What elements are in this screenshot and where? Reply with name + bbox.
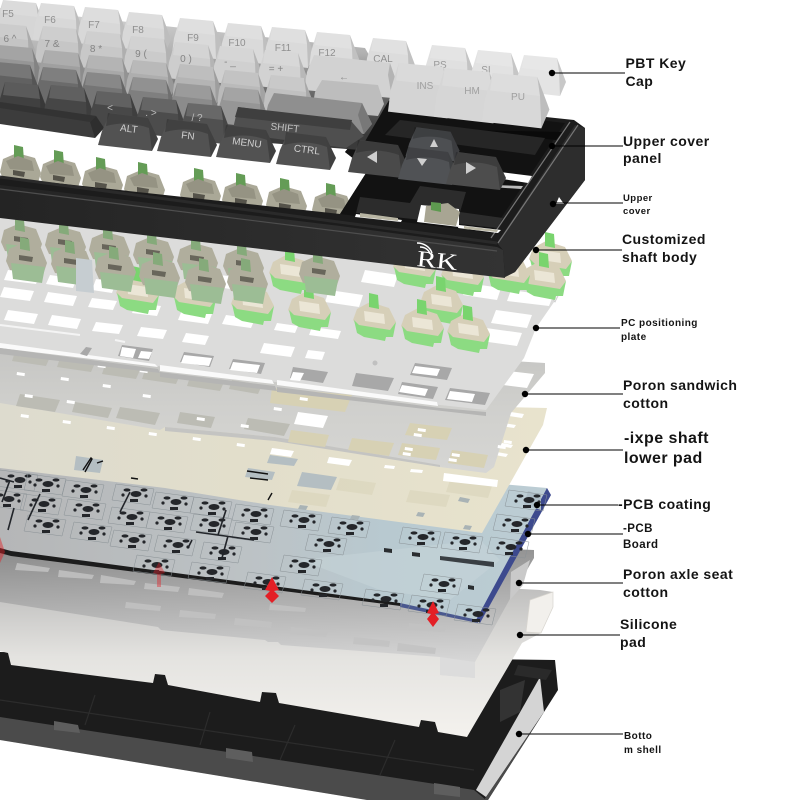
key: backspace: ← xyxy=(339,72,349,83)
number row: 0 ) xyxy=(180,54,192,65)
keycap block shading xyxy=(0,8,392,150)
label: Poron sandwich cotton: Poron sandwich xyxy=(623,377,737,393)
navigation front row: HM xyxy=(464,86,480,97)
lower switches bright xyxy=(116,232,572,353)
label: PCB coating xyxy=(534,496,711,512)
function row: CAL xyxy=(373,54,393,65)
silicone pad xyxy=(0,560,553,737)
function row: F12 xyxy=(318,48,336,59)
key: CTRL xyxy=(276,132,336,170)
label: PCB Board: -PCB xyxy=(623,523,653,535)
label: Upper cover: cover xyxy=(623,206,651,217)
home row xyxy=(0,45,384,116)
plate white windows xyxy=(0,270,553,402)
number row: 9 ( xyxy=(135,49,148,60)
letter row: / ? xyxy=(191,113,203,124)
ixpe shaft lower pad xyxy=(0,395,547,533)
poron cut-outs xyxy=(270,388,488,468)
function row: F6 xyxy=(44,15,56,26)
label: PBT Key Cap: PBT Key xyxy=(626,55,686,71)
label: PCB Board xyxy=(525,523,658,551)
label: Poron axle seat cotton xyxy=(516,566,733,600)
lower home row xyxy=(0,62,372,134)
key: shift xyxy=(232,107,364,148)
lower switches dull xyxy=(1,218,340,304)
number row: 7 & xyxy=(44,39,60,50)
bottom shell xyxy=(0,652,558,800)
label: Upper cover: Upper xyxy=(623,193,653,204)
label: PBT Key Cap: Cap xyxy=(626,73,653,89)
label: Customized shaft body: shaft body xyxy=(622,249,697,265)
PC positioning plate xyxy=(0,215,561,416)
navigation back row xyxy=(424,45,566,96)
label: ixpe shaft lower pad xyxy=(523,430,709,467)
upper cover xyxy=(0,100,585,278)
key: CTRL: CTRL xyxy=(293,143,321,158)
customized shaft body: switches xyxy=(0,145,572,353)
number row: 6 ^ xyxy=(3,34,17,45)
label: Poron sandwich cotton: cotton xyxy=(623,395,668,411)
function row: F8 xyxy=(132,25,144,36)
key: FN: FN xyxy=(181,130,195,143)
key: MENU xyxy=(216,125,276,163)
number row: = + xyxy=(269,64,283,75)
key: backspace xyxy=(304,55,398,98)
label: Poron sandwich cotton xyxy=(522,377,737,411)
navigation front row: INS xyxy=(417,81,434,92)
function row: F9 xyxy=(187,33,199,44)
axle seat slots xyxy=(15,563,446,654)
label: PCB coating: -PCB coating xyxy=(618,496,711,512)
label: Customized shaft body: Customized xyxy=(622,231,706,247)
label: PCB Board: Board xyxy=(623,539,658,551)
function row: F5 xyxy=(2,9,14,20)
label: Upper cover xyxy=(550,193,653,217)
label: Customized shaft body xyxy=(533,231,706,265)
navigation back row: SI xyxy=(481,65,491,76)
label: Silicone pad: Silicone xyxy=(620,616,677,632)
key: FN xyxy=(157,119,217,157)
key: ALT xyxy=(98,113,158,151)
number row xyxy=(0,23,398,98)
label: ixpe shaft lower pad: -ixpe shaft xyxy=(624,430,709,447)
label: Upper cover panel: panel xyxy=(623,150,662,166)
number row: - _ xyxy=(224,57,236,68)
label: PBT Key Cap xyxy=(549,55,686,89)
red switch pins xyxy=(0,537,439,627)
label: Silicone pad: pad xyxy=(620,634,646,650)
label: PC positioning plate: PC positioning xyxy=(621,318,698,329)
arrow keys xyxy=(348,127,506,190)
key: enter xyxy=(264,93,372,134)
key: MENU: MENU xyxy=(232,136,262,151)
function row: F10 xyxy=(228,38,246,49)
RK logo: RK xyxy=(416,246,459,275)
label: Upper cover panel: Upper cover xyxy=(623,133,710,149)
label: PC positioning plate: plate xyxy=(621,332,647,343)
number row: 8 * xyxy=(90,44,102,55)
PBT keycaps xyxy=(0,0,566,190)
plate dark wells xyxy=(80,345,490,405)
key: shift: SHIFT xyxy=(270,122,300,135)
poron axle seat cotton xyxy=(0,530,534,678)
key: enter top xyxy=(312,80,384,116)
PCB footprints xyxy=(0,470,547,625)
navigation back row: PS xyxy=(433,60,447,71)
function row: F7 xyxy=(88,20,100,31)
letter row: . > xyxy=(145,108,157,119)
label: ixpe shaft lower pad: lower pad xyxy=(624,450,703,467)
label: Bottom shell xyxy=(516,731,662,756)
label: Upper cover panel xyxy=(549,133,710,166)
pad cut-outs xyxy=(74,455,337,490)
RK logo xyxy=(416,243,459,275)
label: Poron axle seat cotton: Poron axle seat xyxy=(623,566,733,582)
label: PC positioning plate xyxy=(533,318,698,343)
function row xyxy=(0,0,415,79)
label: Silicone pad xyxy=(517,616,677,650)
label: Poron axle seat cotton: cotton xyxy=(623,584,668,600)
upper cover panel xyxy=(340,103,565,233)
key: space bar xyxy=(0,102,104,138)
key: ALT: ALT xyxy=(119,123,138,136)
poron sandwich cotton xyxy=(0,330,545,487)
label: Bottom shell: Botto xyxy=(624,731,652,742)
letter row: < xyxy=(107,103,113,114)
function row: F11 xyxy=(275,43,292,54)
navigation front row xyxy=(388,63,549,128)
letter row xyxy=(0,82,230,144)
label: Bottom shell: m shell xyxy=(624,745,662,756)
PCB board with coating xyxy=(0,440,551,625)
navigation front row: PU xyxy=(511,92,525,103)
upper switches xyxy=(0,145,353,227)
